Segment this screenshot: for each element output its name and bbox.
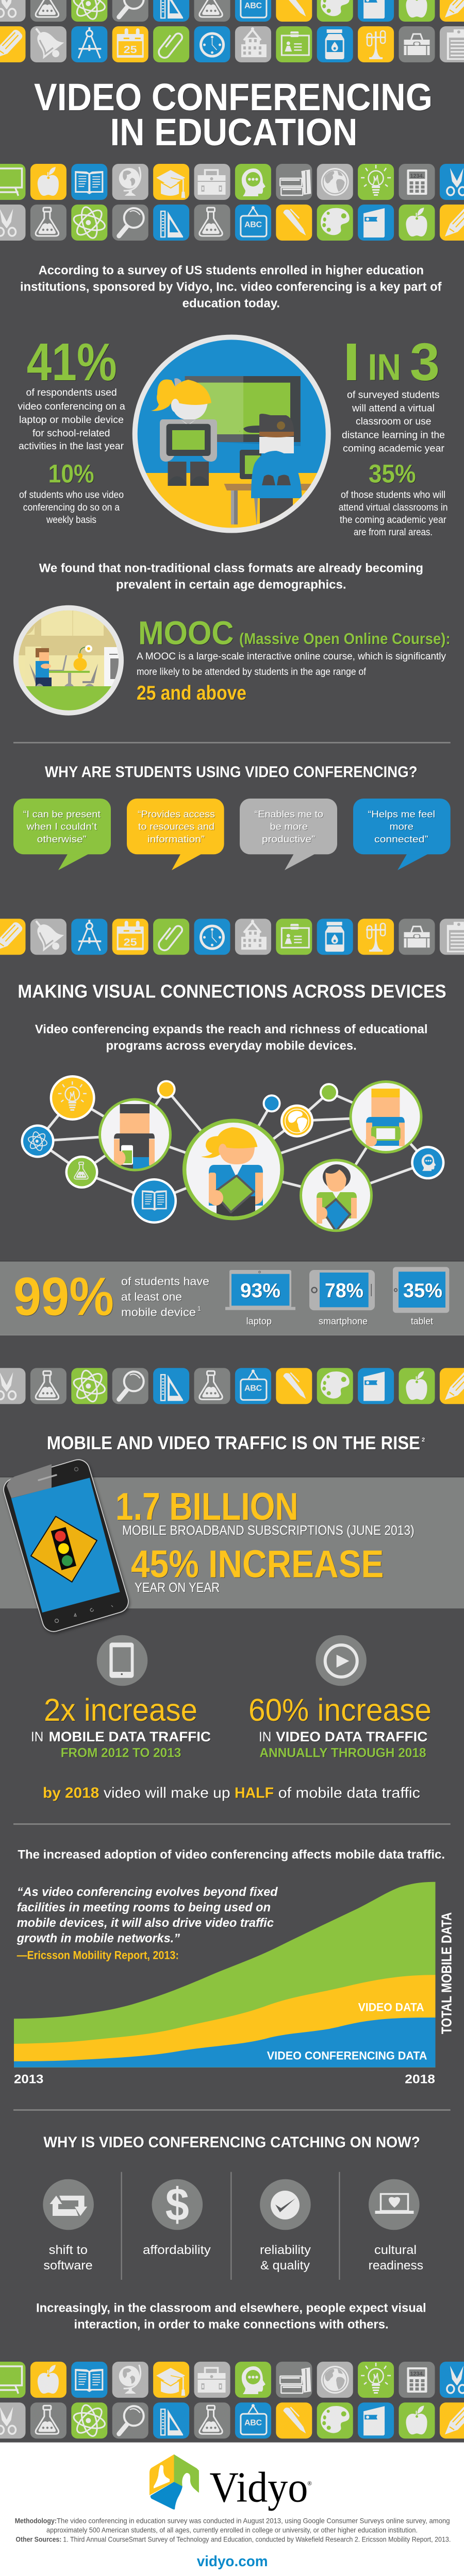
panel: right statistics (339, 332, 448, 538)
stat: 41%: 41% (27, 332, 117, 392)
speech bubble: present: “I can be present (23, 809, 101, 820)
footer panel (0, 2443, 464, 2576)
figure: student at table (29, 645, 98, 686)
icon row: middle science tiles (0, 1368, 464, 1404)
title: IN EDUCATION (110, 111, 358, 154)
icon row: bottom tiles one (0, 2362, 464, 2398)
illustration: classroom in circle (132, 335, 331, 534)
device: laptop 93%: laptop (246, 1316, 272, 1327)
quote: Ericsson: growth in mobile networks.” (16, 1931, 180, 1945)
speech bubble: present (13, 799, 111, 870)
diagram: network of students and ideas (21, 1075, 444, 1232)
text: methodology and sources: Other Sources: (15, 2535, 61, 2544)
text: 35% description (339, 490, 448, 538)
text: increased adoption: The increased adoption of video conferencing affects mobile data traffic. (18, 1848, 445, 1861)
text: 10% description: weekly basis (46, 515, 96, 526)
node: yellow dot (158, 1081, 175, 1097)
panel: left statistics (18, 332, 125, 526)
link: vidyo.com: vidyo.com (197, 2553, 268, 2570)
callout: video half of traffic (43, 1785, 420, 1801)
text: students with a mobile device: 1 (197, 1305, 201, 1312)
text: 10% description: conferencing do so on a (23, 502, 120, 513)
text: from 2012 to 2013: FROM 2012 TO 2013 (61, 1745, 181, 1760)
callout: video half of traffic: of mobile data traffic (278, 1785, 420, 1801)
reason: shift to software (43, 2179, 94, 2273)
text: 35% description: are from rural areas. (354, 527, 433, 538)
reason: affordability (143, 2179, 211, 2257)
callout: video half of traffic: by 2018 (43, 1785, 99, 1801)
speech bubble: productive: productive” (262, 834, 315, 844)
speech bubble: productive: be more (270, 821, 308, 832)
icon row: lower title tiles two: ABC (244, 221, 262, 229)
text: 10% description (19, 490, 124, 526)
intro text: institutions, sponsored by Vidyo, Inc. video conferencing is a key part of (20, 280, 442, 294)
text: 1 in 3 description: of surveyed students (347, 390, 439, 401)
logo: Vidyo: ® (307, 2481, 312, 2487)
speech bubble: productive: “Enables me to (255, 809, 323, 820)
area: video conferencing data (14, 2018, 435, 2067)
illustration: phone with traffic signal (1, 1457, 131, 1634)
icon row: bottom tiles two: ABC (244, 2418, 262, 2427)
text: non-traditional formats (39, 562, 423, 592)
quote: Ericsson: “As video conferencing evolves beyond fixed (17, 1885, 278, 1899)
text: methodology and sources: Methodology: (15, 2517, 57, 2525)
axis label: total mobile data: TOTAL MOBILE DATA (438, 1912, 454, 2034)
text: 1 in 3 description: coming academic year (343, 444, 445, 454)
speech bubble: access: information” (147, 834, 205, 844)
device: tablet 35% (393, 1267, 449, 1327)
icon row: top supplies tiles (0, 20, 464, 65)
icon row: lower title tiles two (0, 205, 464, 241)
stat: 60% increase: 60% increase (248, 1692, 432, 1727)
stat: 45% increase: 45% INCREASE (131, 1543, 384, 1586)
icon row: lower title tiles one: 1234. (410, 173, 424, 179)
speech bubble: access: “Provides access (138, 809, 215, 820)
text: methodology and sources: approximately 500 American students, of all ages, currently enrolled in college or university, or other higher education institution. (46, 2526, 418, 2534)
speech bubble: productive (240, 799, 337, 870)
speech bubble: connected (353, 799, 451, 870)
icon row: top science tiles: ABC (244, 2, 262, 10)
speech bubble: present: when I couldn’t (26, 821, 97, 832)
node: head (411, 1146, 444, 1179)
icon row: lower title tiles one (0, 164, 464, 200)
stat: 1 in 3: 3 (410, 332, 440, 392)
node: student with tablet (183, 1119, 284, 1226)
text: 41% description: video conferencing on a (18, 401, 125, 412)
text: MOOC description: A MOOC is a large-scale interactive online course, which is significantly (137, 651, 446, 662)
text: closing statement (36, 2301, 426, 2331)
panel: mobile data traffic stat (31, 1635, 211, 1760)
device: smartphone 78%: 78% (325, 1280, 363, 1302)
text: students with a mobile device (121, 1275, 209, 1318)
quote: Ericsson: facilities in meeting rooms to being used on (17, 1901, 271, 1914)
stat: 1.7 billion: 1.7 BILLION (115, 1485, 299, 1528)
text: in mobile data traffic: IN (31, 1729, 43, 1744)
reason: reliability and quality (260, 2179, 311, 2273)
figure: standing student (151, 378, 217, 486)
icon: play button (316, 1635, 367, 1686)
reason: shift to software: software (43, 2259, 93, 2273)
text: video conferencing reach: Video conferencing expands the reach and richness of educational (35, 1023, 427, 1037)
callout: video half of traffic: HALF (235, 1785, 274, 1801)
node: atom (21, 1124, 55, 1158)
text: methodology and sources: The video conferencing in education survey was conducted in August 2013, using Google Consumer Surveys online survey, among (57, 2517, 450, 2525)
axis label: 2013: 2013 (14, 2072, 43, 2086)
quote: Ericsson: mobile devices, it will also drive video traffic (17, 1916, 274, 1930)
speech bubble: connected: “Helps me feel (368, 809, 435, 820)
text: video conferencing reach (35, 1023, 427, 1053)
node: student with blue tablet (300, 1159, 373, 1232)
text: 41% description: for school-related (32, 428, 110, 439)
node: student with tablet top right (350, 1080, 423, 1154)
icon row: top supplies tiles: 25 (124, 44, 137, 56)
stat: 25 and above: 25 and above (137, 682, 246, 704)
reason: reliability and quality: & quality (260, 2259, 310, 2273)
area: video data (14, 1975, 435, 2067)
reason: cultural readiness (369, 2179, 423, 2273)
text: annually through 2018: ANNUALLY THROUGH 2018 (259, 1745, 426, 1760)
text: students with a mobile device: of students have (121, 1275, 209, 1287)
text: 1 in 3 description: classroom or use (356, 416, 431, 427)
reason: affordability: $ (165, 2179, 189, 2231)
reason: cultural readiness: cultural (374, 2243, 417, 2257)
text: mobile broadband subscriptions: MOBILE BROADBAND SUBSCRIPTIONS (JUNE 2013) (122, 1523, 415, 1538)
heading: MOOC (138, 614, 451, 651)
text: 41% description: laptop or mobile device (19, 415, 124, 426)
reason: affordability: affordability (143, 2243, 211, 2257)
device: tablet 35%: 35% (403, 1280, 442, 1302)
panel: mobile device ownership band (0, 1261, 464, 1335)
text: 35% description: attend virtual classrooms in (339, 502, 448, 513)
device: laptop 93%: 93% (240, 1280, 280, 1302)
icon row: top science tiles (0, 0, 464, 22)
text: in video data traffic: IN (259, 1729, 271, 1744)
heading: why are students using video conferencing: WHY ARE STUDENTS USING VIDEO CONFERENCING? (45, 762, 418, 781)
icon: smartphone (97, 1635, 147, 1686)
axis label: 2018: 2018 (405, 2072, 435, 2086)
heading: MOOC: MOOC (138, 614, 234, 651)
node: green dot (321, 1084, 337, 1100)
heading: mobile and video traffic: 2 (422, 1437, 425, 1443)
figure: seated student and desk (224, 414, 311, 524)
title: VIDEO CONFERENCING (34, 76, 433, 118)
intro text (20, 264, 442, 311)
panel: video data traffic stat (248, 1635, 432, 1760)
text: 35% description: the coming academic year (340, 515, 446, 526)
title (34, 76, 433, 154)
text: 1 in 3 description (342, 390, 445, 454)
node: flask (65, 1156, 98, 1189)
text: year on year: YEAR ON YEAR (135, 1581, 220, 1595)
stat: 99%: 99% (13, 1266, 114, 1327)
speech bubble: connected: connected” (374, 834, 428, 844)
text: 35% description: of those students who will (341, 490, 445, 501)
device: smartphone 78% (309, 1270, 375, 1327)
text: 1 in 3 description: will attend a virtual (352, 403, 435, 414)
logo: Vidyo: Vidyo (209, 2464, 308, 2512)
panel: broadband band (0, 1477, 464, 1608)
node: yellow globe (280, 1105, 313, 1138)
label: video conferencing data: VIDEO CONFERENCING DATA (267, 2049, 427, 2062)
speech bubble: access: to resources and (138, 821, 214, 832)
label: video data: VIDEO DATA (358, 2001, 424, 2013)
intro text: According to a survey of US students enrolled in higher education (39, 264, 424, 278)
logo: Vidyo (150, 2454, 312, 2512)
stat: 1 in 3 (347, 332, 440, 392)
text: students with a mobile device: at least one (121, 1290, 182, 1303)
text: 41% description: activities in the last year (19, 441, 124, 452)
speech bubble: present: otherwise” (37, 834, 87, 844)
icon row: middle science tiles: ABC (244, 1384, 262, 1393)
area: total mobile data (14, 1882, 435, 2067)
text: in video data traffic: VIDEO DATA TRAFFIC (276, 1729, 428, 1744)
text: 41% description: of respondents used (26, 387, 117, 398)
reason: shift to software: shift to (49, 2243, 88, 2257)
node: light bulb (50, 1075, 95, 1121)
callout: video half of traffic: video will make up (104, 1785, 230, 1801)
node: blue dot (264, 1095, 279, 1111)
text: non-traditional formats: prevalent in certain age demographics. (116, 578, 346, 592)
text: methodology and sources (15, 2517, 451, 2544)
text: 10% description: of students who use video (19, 490, 124, 501)
text: MOOC description: more likely to be attended by students in the age range of (137, 667, 367, 677)
reason: cultural readiness: readiness (369, 2259, 423, 2273)
stat: 35%: 35% (369, 460, 416, 488)
speech bubble: access (127, 799, 224, 870)
text: in mobile data traffic: MOBILE DATA TRAFFIC (49, 1729, 211, 1744)
text: 41% description (18, 387, 125, 452)
node: student with phone (98, 1098, 172, 1173)
illustration: home learner in circle (13, 605, 124, 717)
icon row: bottom tiles two (0, 2402, 464, 2438)
stat: 1 in 3: IN (368, 347, 401, 388)
speech bubble: connected: more (390, 821, 413, 832)
quote: Ericsson: —Ericsson Mobility Report, 2013: (17, 1949, 179, 1962)
text: closing statement: interaction, in order to make connections with others. (74, 2317, 389, 2331)
text: non-traditional formats: We found that non-traditional class formats are already becoming (39, 562, 423, 575)
stat: 2x increase: 2x increase (44, 1692, 197, 1727)
panel: MOOC text (137, 614, 451, 704)
device: smartphone 78%: smartphone (319, 1316, 368, 1327)
reason: reliability and quality: reliability (260, 2243, 311, 2257)
stat: 10%: 10% (48, 460, 94, 488)
text: video conferencing reach: programs across everyday mobile devices. (106, 1039, 357, 1053)
text: MOOC description (137, 651, 446, 677)
icon row: middle supplies tiles: 25 (124, 937, 137, 948)
text: closing statement: Increasingly, in the classroom and elsewhere, people expect visual (36, 2301, 426, 2315)
text: 1 in 3 description: distance learning in the (342, 430, 445, 441)
heading: mobile and video traffic: MOBILE AND VIDEO TRAFFIC IS ON THE RISE (47, 1432, 420, 1453)
intro text: education today. (183, 297, 280, 311)
device: laptop 93% (225, 1270, 295, 1327)
heading: why is video conferencing catching on: WHY IS VIDEO CONFERENCING CATCHING ON NOW? (43, 2134, 420, 2151)
quote: Ericsson (16, 1885, 278, 1962)
chart: total mobile data stacked area (14, 1882, 454, 2086)
icon row: middle supplies tiles (0, 913, 464, 957)
node: open book (131, 1178, 177, 1224)
device: tablet 35%: tablet (411, 1316, 433, 1327)
icon row: bottom tiles one: 1234. (410, 2371, 424, 2377)
text: students with a mobile device: mobile device (121, 1306, 196, 1318)
